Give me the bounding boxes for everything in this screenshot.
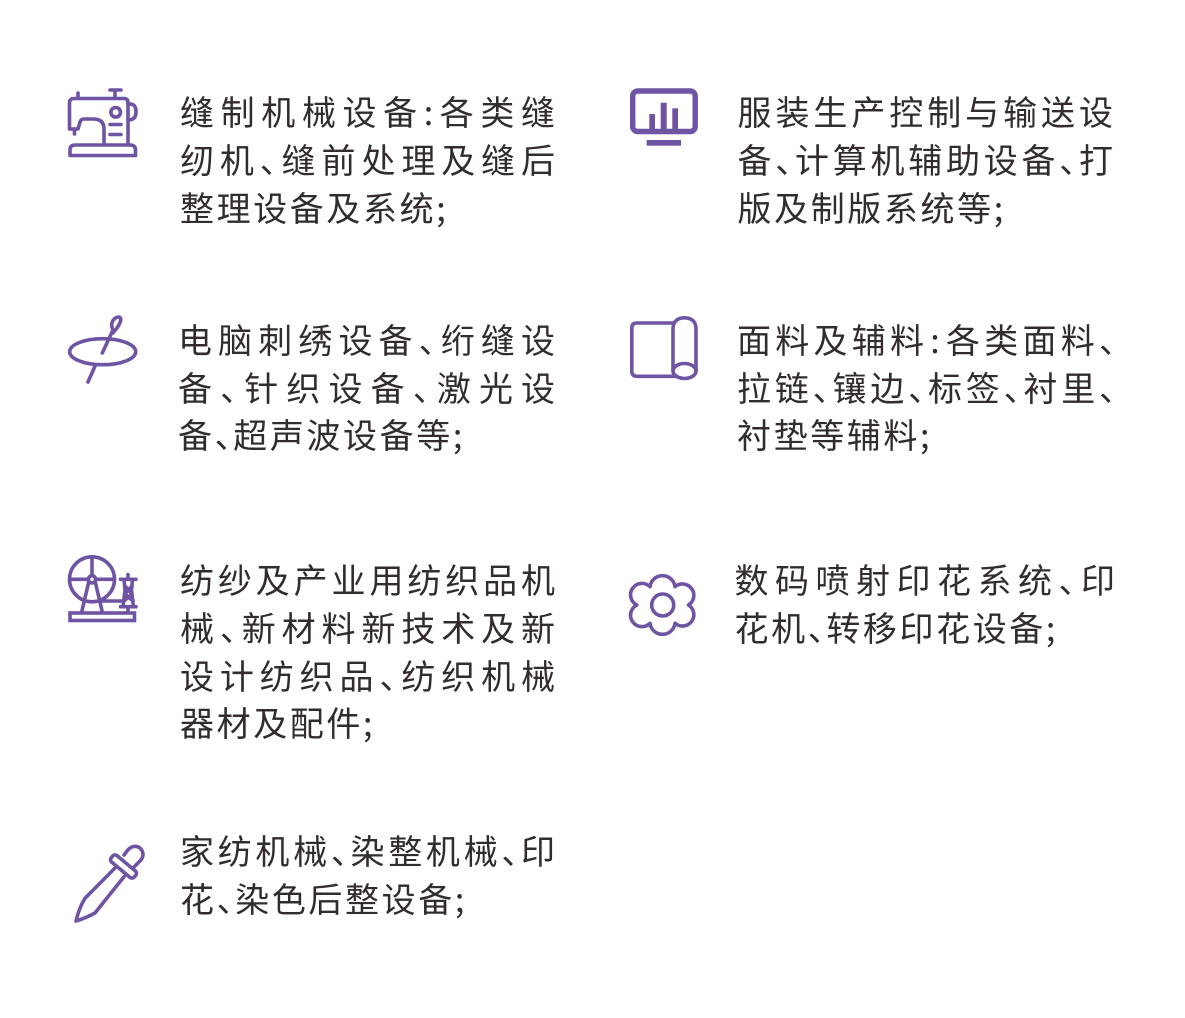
text: embroidery equipment: 备、针织设备、激光设 — [178, 363, 555, 411]
icon: fabric roll — [632, 318, 696, 378]
text: garment production control: 服装生产控制与输送设 — [738, 87, 1113, 135]
icon: spinning wheel — [70, 557, 136, 620]
text: embroidery equipment — [178, 315, 555, 458]
text: home textile machinery — [180, 826, 555, 922]
icon: dropper — [76, 846, 143, 921]
text: spinning and industrial textiles: 器材及配件; — [180, 697, 375, 746]
text: digital printing — [734, 555, 1115, 651]
text: spinning and industrial textiles: 械、新材料新技术及新 — [180, 603, 555, 651]
text: garment production control: 备、计算机辅助设备、打 — [738, 135, 1113, 183]
icon: monitor with bars — [633, 91, 695, 146]
text: spinning and industrial textiles: 纺纱及产业用纺织品机 — [180, 555, 555, 603]
text: home textile machinery: 家纺机械、染整机械、印 — [180, 826, 555, 874]
icon: sewing machine — [70, 90, 136, 156]
icon: flower — [631, 576, 694, 634]
text: embroidery equipment: 备、超声波设备等; — [178, 409, 465, 458]
text: sewing machinery — [180, 87, 555, 231]
text: embroidery equipment: 电脑刺绣设备、绗缝设 — [178, 315, 555, 363]
text: sewing machinery: 缝制机械设备:各类缝 — [180, 87, 555, 135]
text: fabrics and accessories — [737, 315, 1115, 458]
text: spinning and industrial textiles — [180, 555, 555, 746]
text: sewing machinery: 整理设备及系统; — [180, 182, 448, 231]
text: fabrics and accessories: 衬垫等辅料; — [737, 409, 932, 458]
text: sewing machinery: 纫机、缝前处理及缝后 — [180, 135, 555, 183]
text: garment production control: 版及制版系统等; — [738, 182, 1006, 231]
icon: embroidery needle and hoop — [70, 317, 136, 382]
text: home textile machinery: 花、染色后整设备; — [180, 873, 467, 922]
text: digital printing: 花机、转移印花设备; — [734, 602, 1058, 651]
text: spinning and industrial textiles: 设计纺织品、纺织机械 — [180, 651, 555, 699]
text: garment production control — [738, 87, 1113, 231]
text: digital printing: 数码喷射印花系统、印 — [734, 555, 1115, 603]
